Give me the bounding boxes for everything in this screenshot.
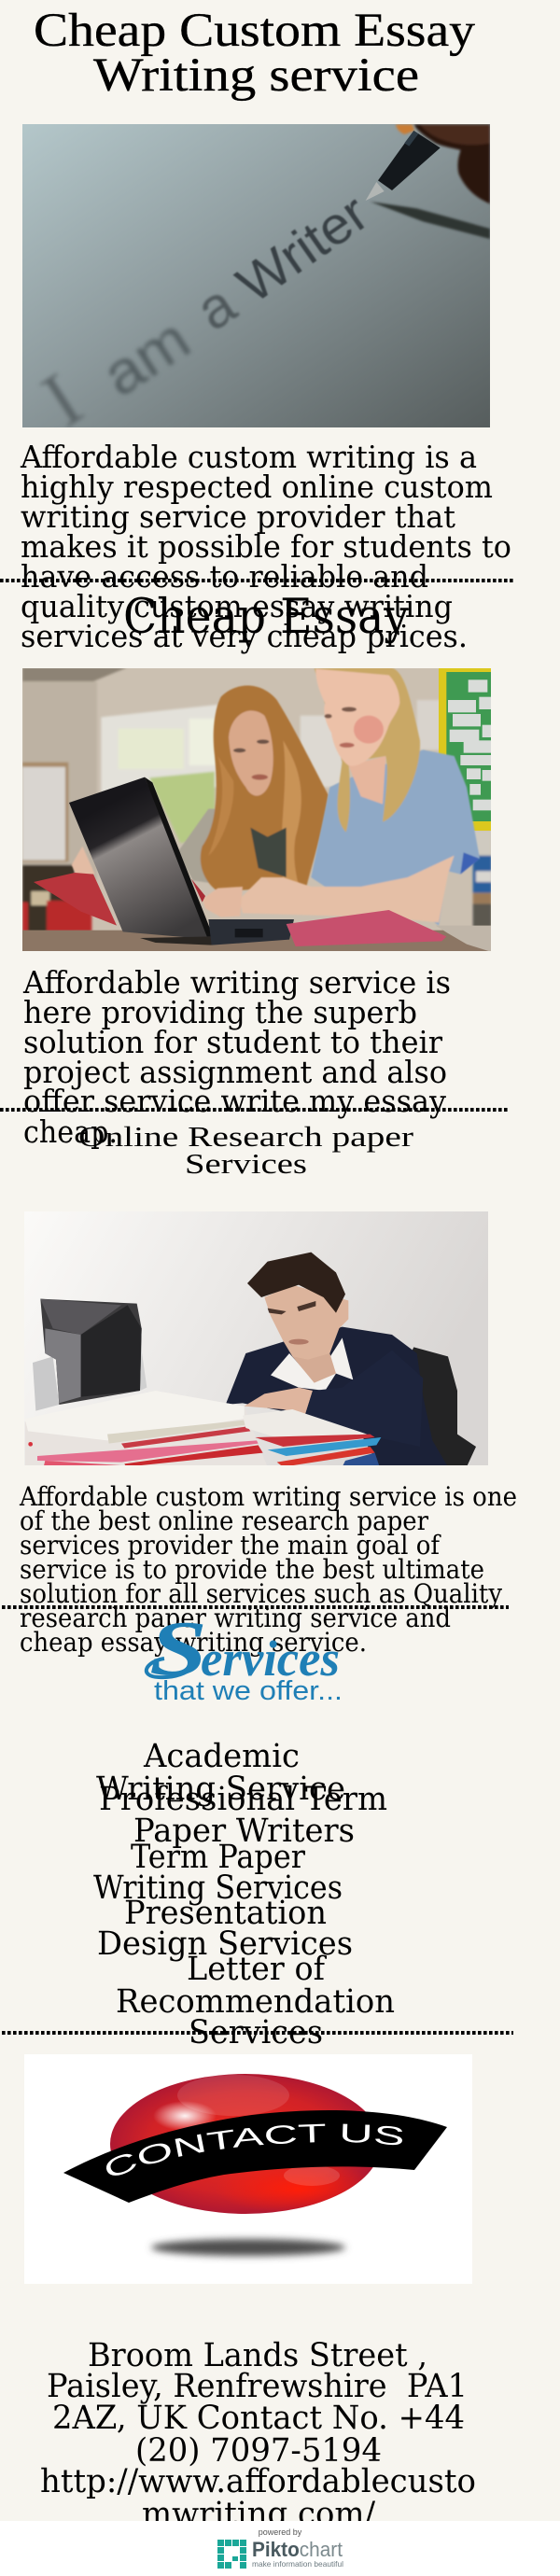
paragraph: writing service: project assignment and also — [23, 1055, 447, 1090]
paragraph: writing service: offer service write my essay — [23, 1084, 446, 1119]
contact details: Broom Lands Street , — [88, 2337, 427, 2374]
item: term paper writing: Term Paper — [131, 1839, 305, 1876]
paragraph: writing service — [22, 965, 451, 1150]
office chair — [413, 1347, 476, 1465]
item: letter of recommendation — [116, 1951, 395, 2051]
paragraph: research paper services — [19, 1481, 517, 1658]
graphic: contact us badge — [24, 2054, 472, 2284]
contact details: 2AZ, UK Contact No. +44 — [52, 2400, 465, 2437]
footer: powered by Piktochart: powered by — [259, 2527, 302, 2537]
heading: Cheap Essay: Cheap Essay — [123, 590, 409, 645]
footer: powered by Piktochart — [0, 2521, 560, 2576]
list: services offered — [93, 1738, 395, 2051]
item: term paper writers: Professional Term — [99, 1781, 387, 1818]
item: term paper writing: Writing Services — [93, 1869, 343, 1907]
paragraph: research paper services: Affordable custom writing service is one — [19, 1481, 517, 1512]
pen shadow — [371, 202, 490, 239]
handwritten words on paper: am — [91, 306, 202, 409]
item: letter of recommendation: Letter of — [187, 1951, 328, 1988]
red folder — [34, 873, 117, 926]
handwritten words on paper: Writer — [227, 184, 379, 315]
paragraph: writing service: cheap. — [23, 1114, 118, 1150]
table — [22, 931, 492, 952]
item: academic writing — [96, 1738, 345, 1808]
laptop — [69, 777, 294, 945]
contact details: http://www.affordablecusto — [40, 2463, 476, 2500]
hand — [396, 124, 490, 203]
classroom background — [22, 667, 492, 931]
contact details — [40, 2337, 476, 2533]
paragraph: intro: makes it possible for students to — [21, 529, 511, 565]
item: term paper writing — [93, 1839, 343, 1907]
heading: Online Research paper Services: Services — [185, 1147, 307, 1180]
paragraph: intro: quality custom essay writing — [21, 589, 453, 624]
title — [34, 5, 476, 102]
handwritten words on paper: I — [28, 357, 97, 443]
item: presentation design — [97, 1895, 353, 1963]
paragraph: intro — [20, 440, 511, 654]
pen — [378, 131, 441, 190]
paragraph: writing service: solution for student to their — [23, 1025, 442, 1060]
paragraph: intro: writing service provider that — [21, 499, 455, 535]
item: term paper writers: Paper Writers — [133, 1813, 355, 1850]
paragraph: intro: services at very cheap prices. — [21, 619, 468, 654]
logo: Services that we offer: that we offer... — [154, 1676, 343, 1706]
item: academic writing: Academic — [143, 1738, 300, 1775]
photo: teacher and student at laptop — [22, 667, 492, 952]
icon: Piktochart logo — [217, 2540, 246, 2569]
paragraph: research paper services: cheap essay writing service. — [20, 1627, 367, 1658]
paragraph: research paper services: services provider the main goal of — [20, 1530, 441, 1561]
black banner — [63, 2110, 447, 2203]
item: presentation design: Design Services — [97, 1925, 353, 1963]
paragraph: writing service: here providing the superb — [23, 995, 417, 1030]
paragraph: intro: highly respected online custom — [21, 469, 493, 505]
item: academic writing: Writing Service — [96, 1771, 345, 1808]
photo: pen writing "I am a writer" — [22, 124, 490, 443]
paragraph: research paper services: service is to provide the best ultimate — [20, 1554, 484, 1585]
contact details: (20) 7097-5194 — [135, 2432, 382, 2470]
stacks of papers — [25, 1391, 381, 1467]
pink pouch — [287, 910, 446, 946]
item: letter of recommendation: Services — [189, 2014, 323, 2051]
computer monitor — [33, 1299, 147, 1411]
contact details: mwriting.com/ — [142, 2496, 375, 2533]
item: presentation design: Presentation — [124, 1895, 327, 1932]
man — [226, 1253, 448, 1467]
student — [203, 667, 480, 926]
handwritten words on paper: a — [185, 272, 247, 343]
logo: Services that we offer: S — [149, 1605, 207, 1692]
item: term paper writers — [99, 1781, 387, 1850]
paragraph: writing service: Affordable writing service is — [22, 965, 451, 1001]
item: letter of recommendation: Recommendation — [116, 1983, 395, 2021]
contact details: Paisley, Renfrewshire PA1 — [47, 2368, 468, 2405]
heading: Online Research paper Services: Online Research paper — [78, 1120, 414, 1153]
photo: stressed man with stacks of papers — [24, 1211, 488, 1467]
teacher — [72, 686, 329, 891]
green notice board — [439, 667, 492, 831]
paragraph: research paper services: research paper writing service and — [20, 1603, 451, 1633]
heading: Online Research paper Services — [78, 1120, 414, 1180]
banner text — [108, 2142, 407, 2180]
red sphere — [110, 2074, 381, 2214]
paragraph: intro: Affordable custom writing is a — [20, 440, 477, 475]
logo: Services that we offer: ervices — [201, 1631, 340, 1687]
logo: Services that we offer — [147, 1605, 343, 1706]
title: Writing service — [93, 49, 419, 102]
title: Cheap Custom Essay — [34, 5, 476, 57]
wordmark: Piktochart — [252, 2538, 343, 2561]
paragraph: intro: have access to reliable and — [21, 559, 428, 595]
paragraph: research paper services: solution for all services such as Quality — [20, 1578, 502, 1609]
footer: powered by Piktochart: make information beautiful — [252, 2559, 343, 2569]
floating shadow — [151, 2239, 345, 2256]
paragraph: research paper services: of the best online research paper — [20, 1505, 429, 1536]
handwritten words on paper — [28, 184, 379, 443]
graphic: contact us badge: CONTACT US — [106, 2124, 402, 2176]
